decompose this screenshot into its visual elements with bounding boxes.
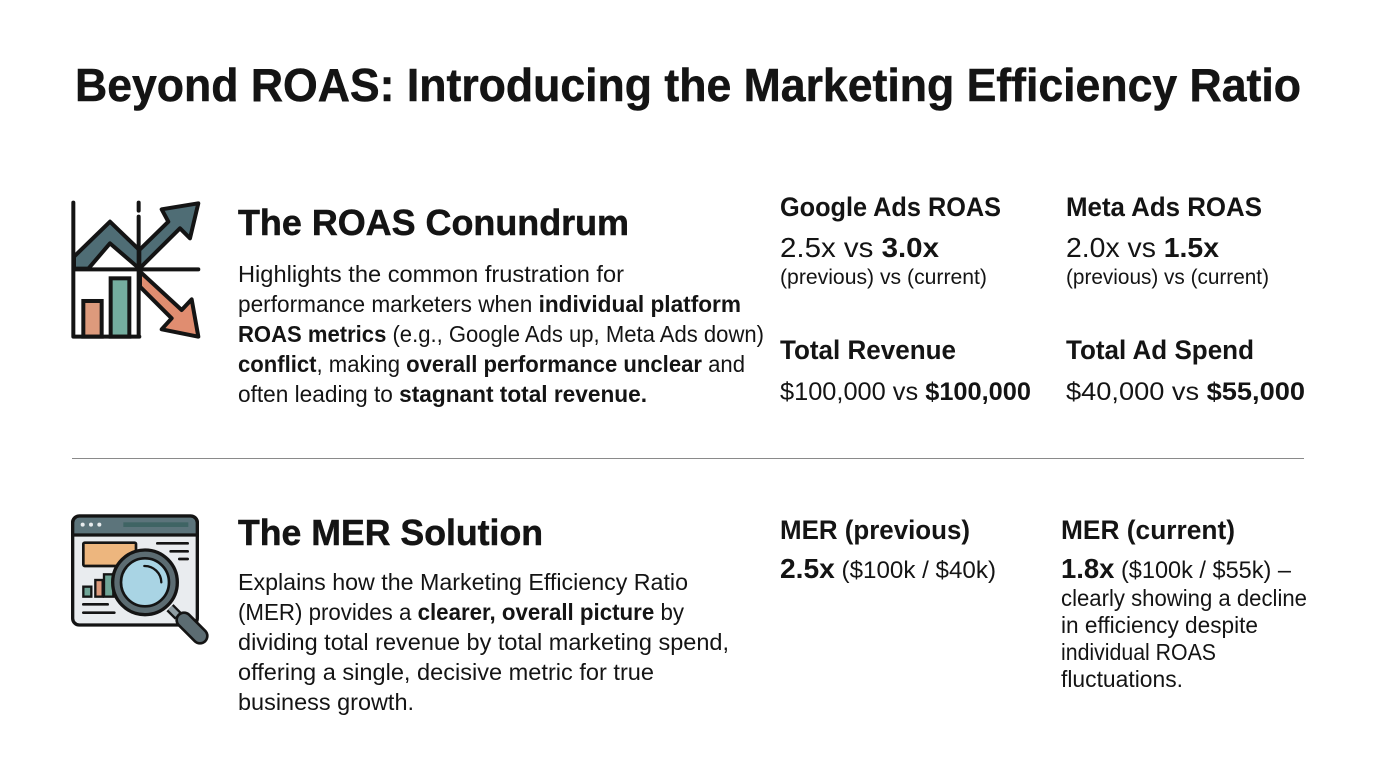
stat: MER current — [1061, 515, 1307, 692]
text block: MER description — [238, 569, 729, 715]
stat: MER previous: 2.5x ($100k / $40k) — [780, 553, 996, 584]
stat: Meta Ads ROAS: (previous) vs (current) — [1066, 266, 1269, 289]
icon: browser window with magnifying glass — [73, 516, 200, 636]
stat: MER current: 1.8x ($100k / $55k) – — [1061, 553, 1292, 584]
stat: Meta Ads ROAS — [1066, 192, 1269, 289]
stat: MER current: individual ROAS — [1061, 639, 1216, 665]
text block: ROAS description: Highlights the common frustration for — [238, 261, 624, 287]
stat: Meta Ads ROAS: 2.0x vs 1.5x — [1066, 232, 1219, 263]
title: Beyond ROAS: Introducing the Marketing Efficiency Ratio — [75, 59, 1301, 111]
stat: Google Ads ROAS: Google Ads ROAS — [780, 192, 1001, 222]
text block: ROAS description: conflict, making overall performance unclear and — [238, 351, 745, 377]
text block: MER description: offering a single, decisive metric for true — [238, 659, 654, 685]
stat: total ad spend: $40,000 vs $55,000 — [1066, 378, 1305, 406]
text block: ROAS description: ROAS metrics (e.g., Google Ads up, Meta Ads down) — [238, 321, 764, 347]
stat: Meta Ads ROAS: Meta Ads ROAS — [1066, 192, 1262, 222]
text block: ROAS description: often leading to stagnant total revenue. — [238, 381, 647, 407]
stat: Google Ads ROAS: 2.5x vs 3.0x — [780, 232, 939, 263]
stat: total revenue: $100,000 vs $100,000 — [780, 378, 1031, 406]
stat: total revenue — [780, 335, 1031, 406]
stat: MER current: MER (current) — [1061, 515, 1235, 545]
text block: ROAS description — [238, 261, 764, 407]
stat: MER previous: MER (previous) — [780, 515, 970, 545]
text block: MER description: Explains how the Marketing Efficiency Ratio — [238, 569, 688, 595]
icon: conflicting chart arrows — [73, 203, 198, 337]
stat: total ad spend — [1066, 335, 1305, 406]
stat: Google Ads ROAS: (previous) vs (current) — [780, 266, 987, 289]
text block: MER description: business growth. — [238, 689, 414, 715]
stat: MER current: clearly showing a decline — [1061, 585, 1307, 611]
stat: total revenue: Total Revenue — [780, 335, 956, 365]
stat: MER current: in efficiency despite — [1061, 612, 1258, 638]
stat: Google Ads ROAS — [780, 192, 1001, 289]
text block: ROAS description: performance marketers when individual platform — [238, 291, 741, 317]
panel: the ROAS conundrum — [73, 192, 1305, 407]
stat: MER previous — [780, 515, 996, 584]
text block: MER description: (MER) provides a clearer, overall picture by — [238, 599, 684, 625]
text block: MER description: dividing total revenue by total marketing spend, — [238, 629, 729, 655]
heading: the ROAS conundrum: The ROAS Conundrum — [238, 202, 629, 243]
stat: total ad spend: Total Ad Spend — [1066, 335, 1254, 365]
stat: MER current: fluctuations. — [1061, 666, 1183, 692]
heading: the MER solution: The MER Solution — [238, 512, 543, 553]
panel: the MER solution — [73, 512, 1307, 715]
